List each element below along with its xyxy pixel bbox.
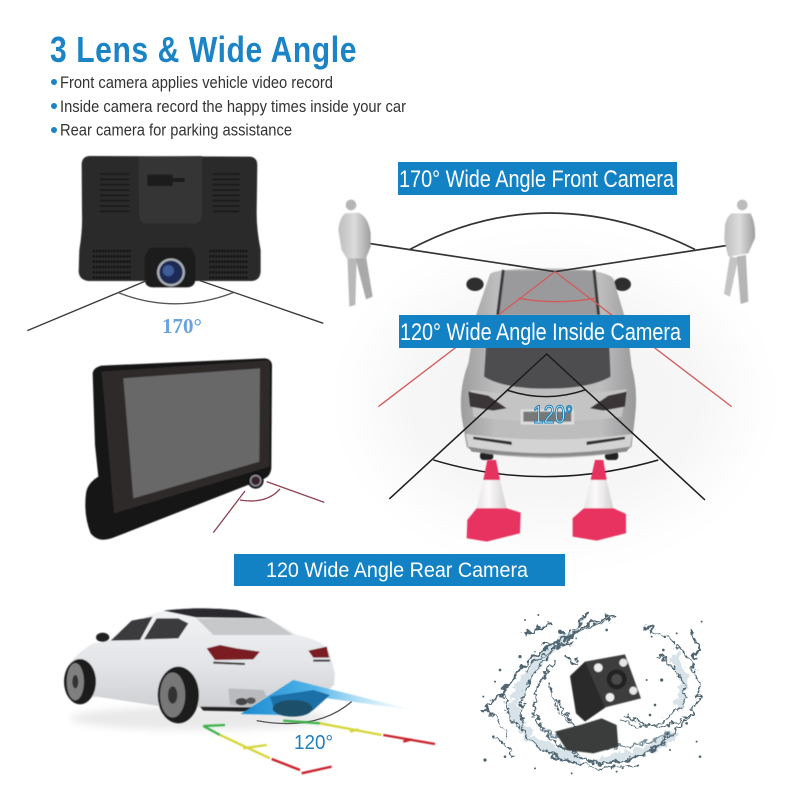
feature bullet list: Inside camera record the happy times inside your car <box>60 97 406 116</box>
beam arc <box>257 702 352 724</box>
dash cam monitor front view <box>85 358 324 540</box>
water splash <box>483 612 700 768</box>
water droplets <box>482 614 703 774</box>
camera body <box>555 654 641 753</box>
car body <box>461 268 636 460</box>
waterproof rear camera with water splash <box>482 612 703 774</box>
car ground shadow <box>70 707 330 730</box>
label: 170 degrees: 170° <box>162 314 202 338</box>
feature bullet list: Front camera applies vehicle video record <box>60 73 333 92</box>
title: 3 Lens & Wide Angle <box>50 29 357 70</box>
front camera angle lines <box>368 213 737 272</box>
label: 120 degrees on side car: 120° <box>294 732 333 754</box>
traffic cone right <box>573 460 626 541</box>
rear camera black lines <box>389 354 705 500</box>
blue camera beam <box>241 680 413 717</box>
dash cam back view with 170 degree angle <box>27 156 323 331</box>
label: 120 degrees on car: 120° <box>533 401 573 429</box>
feature bullet list: Rear camera for parking assistance <box>60 120 292 140</box>
inside camera red lines <box>378 272 732 407</box>
banner: inside camera: 120° Wide Angle Inside Camera <box>400 319 682 346</box>
banner: front camera: 170° Wide Angle Front Camera <box>399 166 675 193</box>
car body <box>64 608 335 723</box>
person right <box>724 200 755 304</box>
person left <box>338 200 373 307</box>
banner: rear camera: 120 Wide Angle Rear Camera <box>266 559 528 582</box>
banner: rear camera <box>234 554 565 586</box>
parking guide lines <box>203 721 435 773</box>
water film bands <box>513 637 684 760</box>
feature bullet list <box>51 73 406 140</box>
rear view car with camera fields of view <box>368 213 737 542</box>
traffic cone left <box>467 460 521 542</box>
side view car with rear camera beam <box>64 608 435 773</box>
soft ground shadow around rear car <box>375 270 735 530</box>
